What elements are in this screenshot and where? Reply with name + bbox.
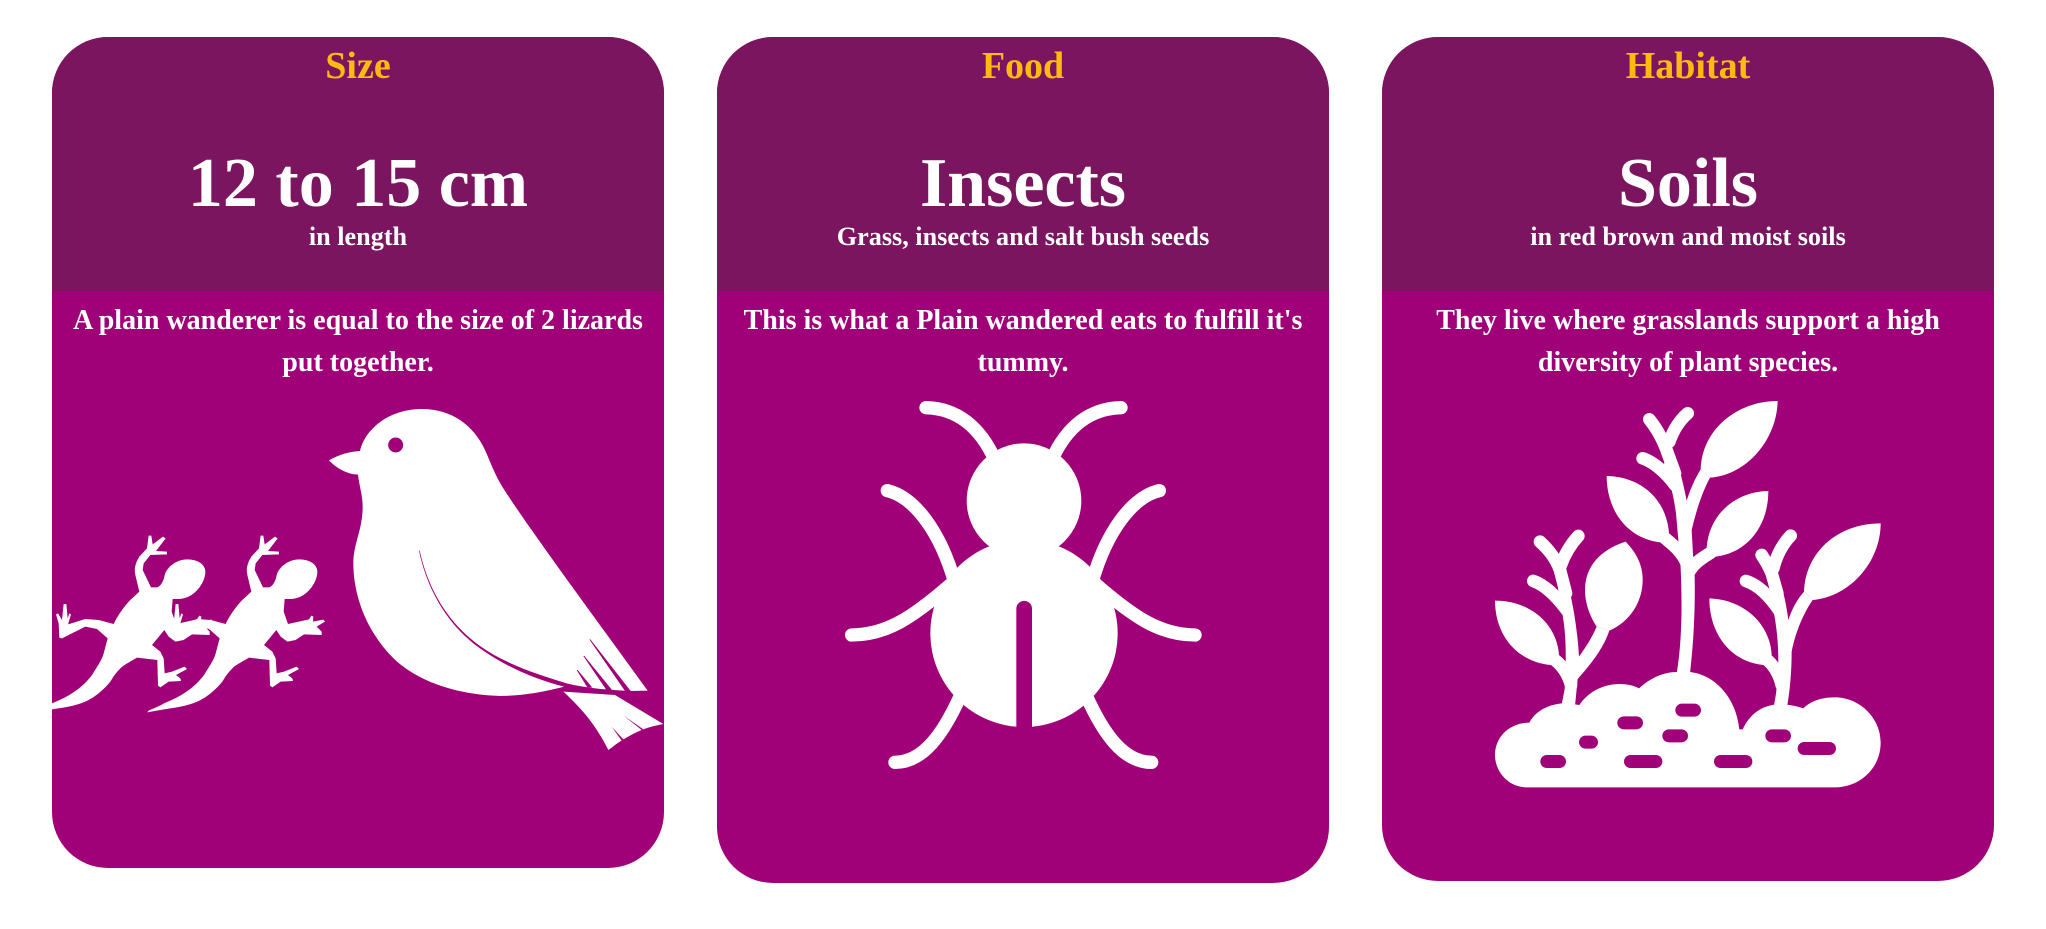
text: habitat line 2: diversity of plant species. bbox=[1538, 347, 1838, 378]
header band: size bbox=[52, 37, 664, 291]
heading: Size: Size bbox=[325, 45, 391, 87]
big figure: Soils: Soils bbox=[1618, 145, 1758, 222]
big figure: Insects: Insects bbox=[920, 145, 1126, 222]
text: size line 1: A plain wanderer is equal to the size of 2 lizards bbox=[73, 305, 643, 336]
header band: habitat bbox=[1382, 37, 1994, 291]
icon: plants in soil bbox=[1495, 401, 1881, 788]
big figure: 12 to 15 cm: 12 to 15 cm bbox=[188, 145, 528, 222]
icon: bird bbox=[329, 409, 664, 750]
subheading: in red brown and moist soils: in red brown and moist soils bbox=[1530, 222, 1846, 251]
heading: Habitat: Habitat bbox=[1626, 45, 1750, 87]
subheading: Grass, insects and salt bush seeds: Grass, insects and salt bush seeds bbox=[837, 222, 1209, 251]
header band: food bbox=[717, 37, 1329, 291]
panel: habitat bbox=[1382, 37, 1994, 881]
text: habitat line 1: They live where grasslands support a high bbox=[1436, 305, 1940, 336]
subheading: in length: in length bbox=[309, 222, 407, 251]
icon: insect bbox=[845, 401, 1202, 769]
panel: size bbox=[52, 37, 664, 868]
panel: food bbox=[717, 37, 1329, 883]
text: size line 2: put together. bbox=[282, 347, 434, 378]
heading: Food: Food bbox=[982, 45, 1064, 87]
icon: two lizards bbox=[52, 536, 325, 712]
text: food line 2: tummy. bbox=[978, 347, 1068, 378]
text: food line 1: This is what a Plain wandered eats to fulfill it's bbox=[744, 305, 1302, 336]
